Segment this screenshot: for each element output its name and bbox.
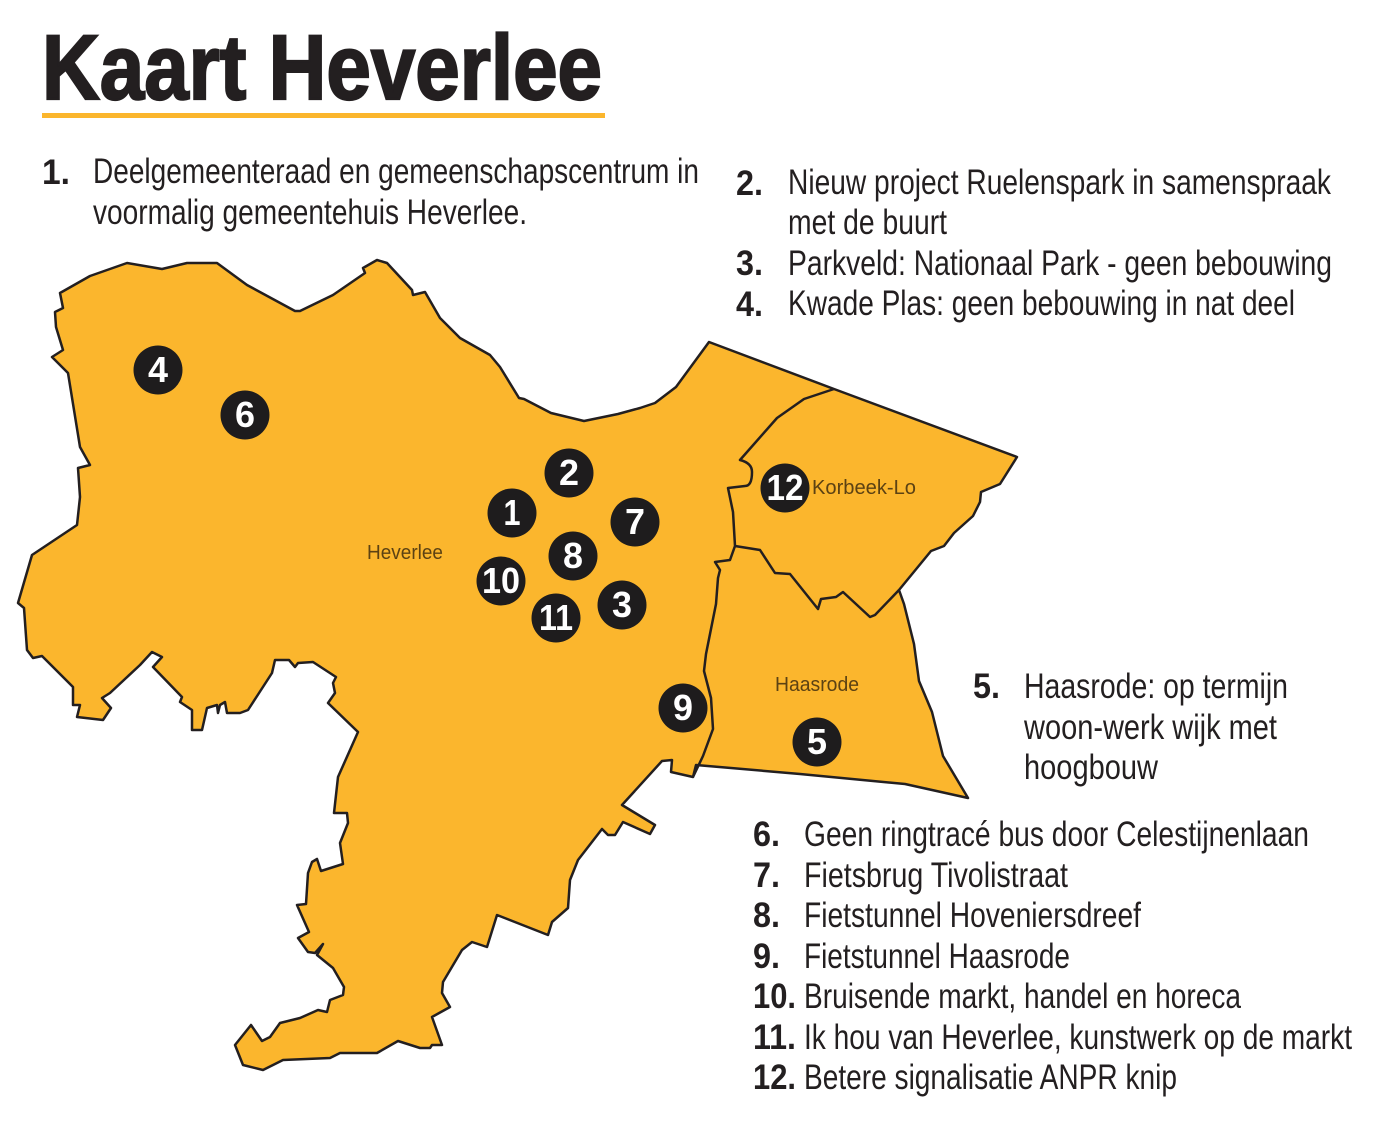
map outline xyxy=(18,260,1017,1070)
title: Kaart Heverlee xyxy=(42,17,602,119)
text block: items 6 to 12: Betere signalisatie ANPR knip xyxy=(804,1058,1177,1097)
label: Korbeek-Lo: Korbeek-Lo xyxy=(812,477,916,499)
text block: items 2 to 4: met de buurt xyxy=(788,203,947,242)
marker 5 xyxy=(792,718,842,766)
text block: item 1: voormalig gemeentehuis Heverlee. xyxy=(93,193,527,232)
label: Haasrode: Haasrode xyxy=(775,674,859,696)
label: Heverlee: Heverlee xyxy=(367,542,443,564)
text block: items 2 to 4: 4. xyxy=(736,285,763,324)
marker 5: 5 xyxy=(807,721,827,762)
text block: items 6 to 12: 6. xyxy=(753,815,780,854)
map of Heverlee, Korbeek-Lo and Haasrode xyxy=(18,260,1017,1070)
text block: item 5: woon-werk wijk met xyxy=(1023,708,1277,747)
border Korbeek-Lo and Haasrode with Heverlee xyxy=(693,389,834,777)
marker 1 xyxy=(488,488,536,538)
text block: items 6 to 12: 7. xyxy=(753,856,780,895)
marker 8 xyxy=(548,532,598,580)
marker 10: 10 xyxy=(482,560,520,601)
marker 2: 2 xyxy=(559,452,579,493)
text block: item 5 xyxy=(973,667,1288,787)
marker 12: 12 xyxy=(766,467,804,508)
text block: item 1: Deelgemeenteraad en gemeenschapscentrum in xyxy=(93,152,699,191)
marker 6: 6 xyxy=(235,394,255,435)
marker 3: 3 xyxy=(612,584,632,625)
marker 11: 11 xyxy=(539,597,573,638)
text block: items 6 to 12: Fietsbrug Tivolistraat xyxy=(804,856,1068,895)
text block: item 5: 5. xyxy=(973,667,1000,706)
marker 2 xyxy=(544,448,594,498)
text block: items 2 to 4: 3. xyxy=(736,244,763,283)
border Korbeek-Lo and Haasrode xyxy=(735,546,899,617)
marker 7 xyxy=(610,498,660,546)
text block: items 2 to 4 xyxy=(736,163,1332,324)
text block: item 5: Haasrode: op termijn xyxy=(1024,667,1288,706)
marker 4: 4 xyxy=(148,349,168,390)
text block: items 6 to 12: 12. xyxy=(753,1058,796,1097)
text block: items 6 to 12: Bruisende markt, handel en horeca xyxy=(804,977,1241,1016)
marker 3 xyxy=(598,580,646,630)
text block: items 6 to 12 xyxy=(753,815,1352,1097)
text block: item 1: 1. xyxy=(42,153,70,192)
text block: items 6 to 12: 8. xyxy=(753,896,780,935)
marker 9 xyxy=(658,684,708,732)
marker 8: 8 xyxy=(563,535,583,576)
text block: item 1 xyxy=(42,152,699,232)
text block: items 6 to 12: 10. xyxy=(753,977,796,1016)
marker 4 xyxy=(134,346,182,394)
marker 12 xyxy=(760,464,810,512)
text block: items 2 to 4: 2. xyxy=(736,164,763,203)
text block: items 6 to 12: Fietstunnel Haasrode xyxy=(804,937,1070,976)
text block: item 5: hoogbouw xyxy=(1024,748,1159,787)
marker 7: 7 xyxy=(625,501,645,542)
marker 10 xyxy=(476,556,526,606)
text block: items 6 to 12: 9. xyxy=(753,937,780,976)
marker 1: 1 xyxy=(504,492,520,533)
marker 9: 9 xyxy=(673,687,693,728)
text block: items 6 to 12: 11. xyxy=(753,1018,796,1057)
marker 6 xyxy=(220,390,270,440)
text block: items 6 to 12: Fietstunnel Hoveniersdreef xyxy=(804,896,1141,935)
marker 11 xyxy=(532,594,580,642)
